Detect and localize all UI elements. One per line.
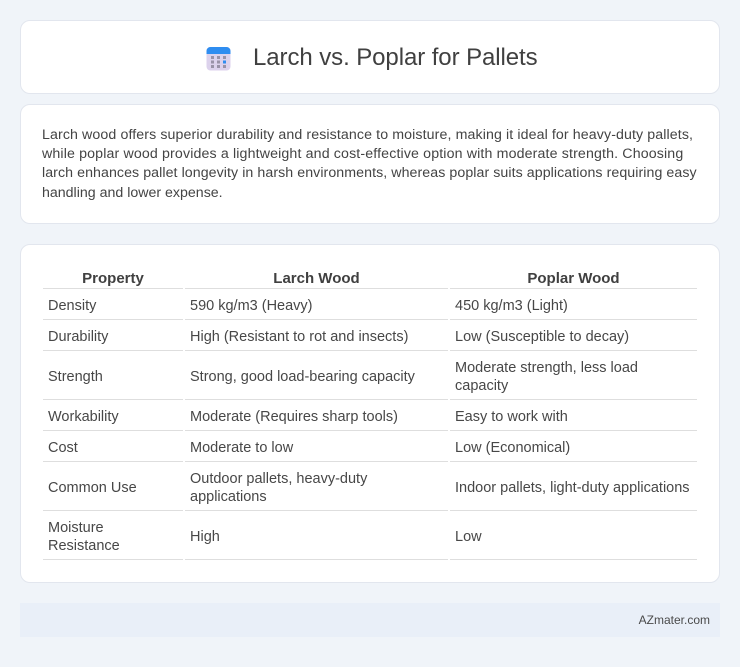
row: workability (48, 409, 568, 425)
row: cost: Moderate to low (190, 440, 293, 456)
row: durability: Low (Susceptible to decay) (455, 329, 629, 345)
row: strength: Strength (48, 369, 103, 385)
row: common use: Common Use (48, 480, 137, 496)
header row: Larch Wood (273, 270, 360, 287)
row: moisture resistance: Low (455, 529, 482, 545)
panel: comparison table (20, 244, 720, 583)
title: Larch vs. Poplar for Pallets (253, 44, 538, 71)
row: durability (48, 329, 629, 345)
panel: description (20, 104, 720, 224)
row: density (48, 298, 568, 314)
row: common use: Indoor pallets, light-duty applications (455, 480, 690, 496)
header row (82, 270, 620, 287)
header row: Poplar Wood (527, 270, 620, 287)
description text: while poplar wood provides a lightweight and cost-effective option with moderate strength. Choosing (42, 146, 683, 162)
row: moisture resistance: Moisture (48, 520, 104, 536)
row: workability: Moderate (Requires sharp tools) (190, 409, 398, 425)
description text: Larch wood offers superior durability and resistance to moisture, making it ideal for heavy-duty pallets, (42, 127, 693, 143)
icon: calendar (206, 47, 230, 70)
footer bar (20, 603, 720, 637)
row: density: 590 kg/m3 (Heavy) (190, 298, 312, 314)
row: moisture resistance: High (190, 529, 220, 545)
row: strength: Strong, good load-bearing capacity (190, 369, 415, 385)
row: durability: Durability (48, 329, 108, 345)
row: common use (48, 471, 690, 505)
row: density: 450 kg/m3 (Light) (455, 298, 568, 314)
row: strength (48, 360, 638, 394)
row: density: Density (48, 298, 96, 314)
row: cost: Cost (48, 440, 78, 456)
row: strength: capacity (455, 378, 508, 394)
footer credit: AZmater.com (639, 613, 710, 627)
row: strength: Moderate strength, less load (455, 360, 638, 376)
title card (20, 20, 720, 94)
description text: handling and lower expense. (42, 185, 223, 201)
row: common use: Outdoor pallets, heavy-duty (190, 471, 367, 487)
row: workability: Easy to work with (455, 409, 568, 425)
header row: Property (82, 270, 144, 287)
row: moisture resistance: Resistance (48, 538, 120, 554)
row: durability: High (Resistant to rot and insects) (190, 329, 408, 345)
row: common use: applications (190, 489, 267, 505)
description text (42, 127, 697, 201)
description text: larch enhances pallet longevity in harsh environments, whereas poplar suits applications requiring easy (42, 165, 697, 181)
row: cost (48, 440, 570, 456)
row: cost: Low (Economical) (455, 440, 570, 456)
row: workability: Workability (48, 409, 119, 425)
row: moisture resistance (48, 520, 482, 554)
